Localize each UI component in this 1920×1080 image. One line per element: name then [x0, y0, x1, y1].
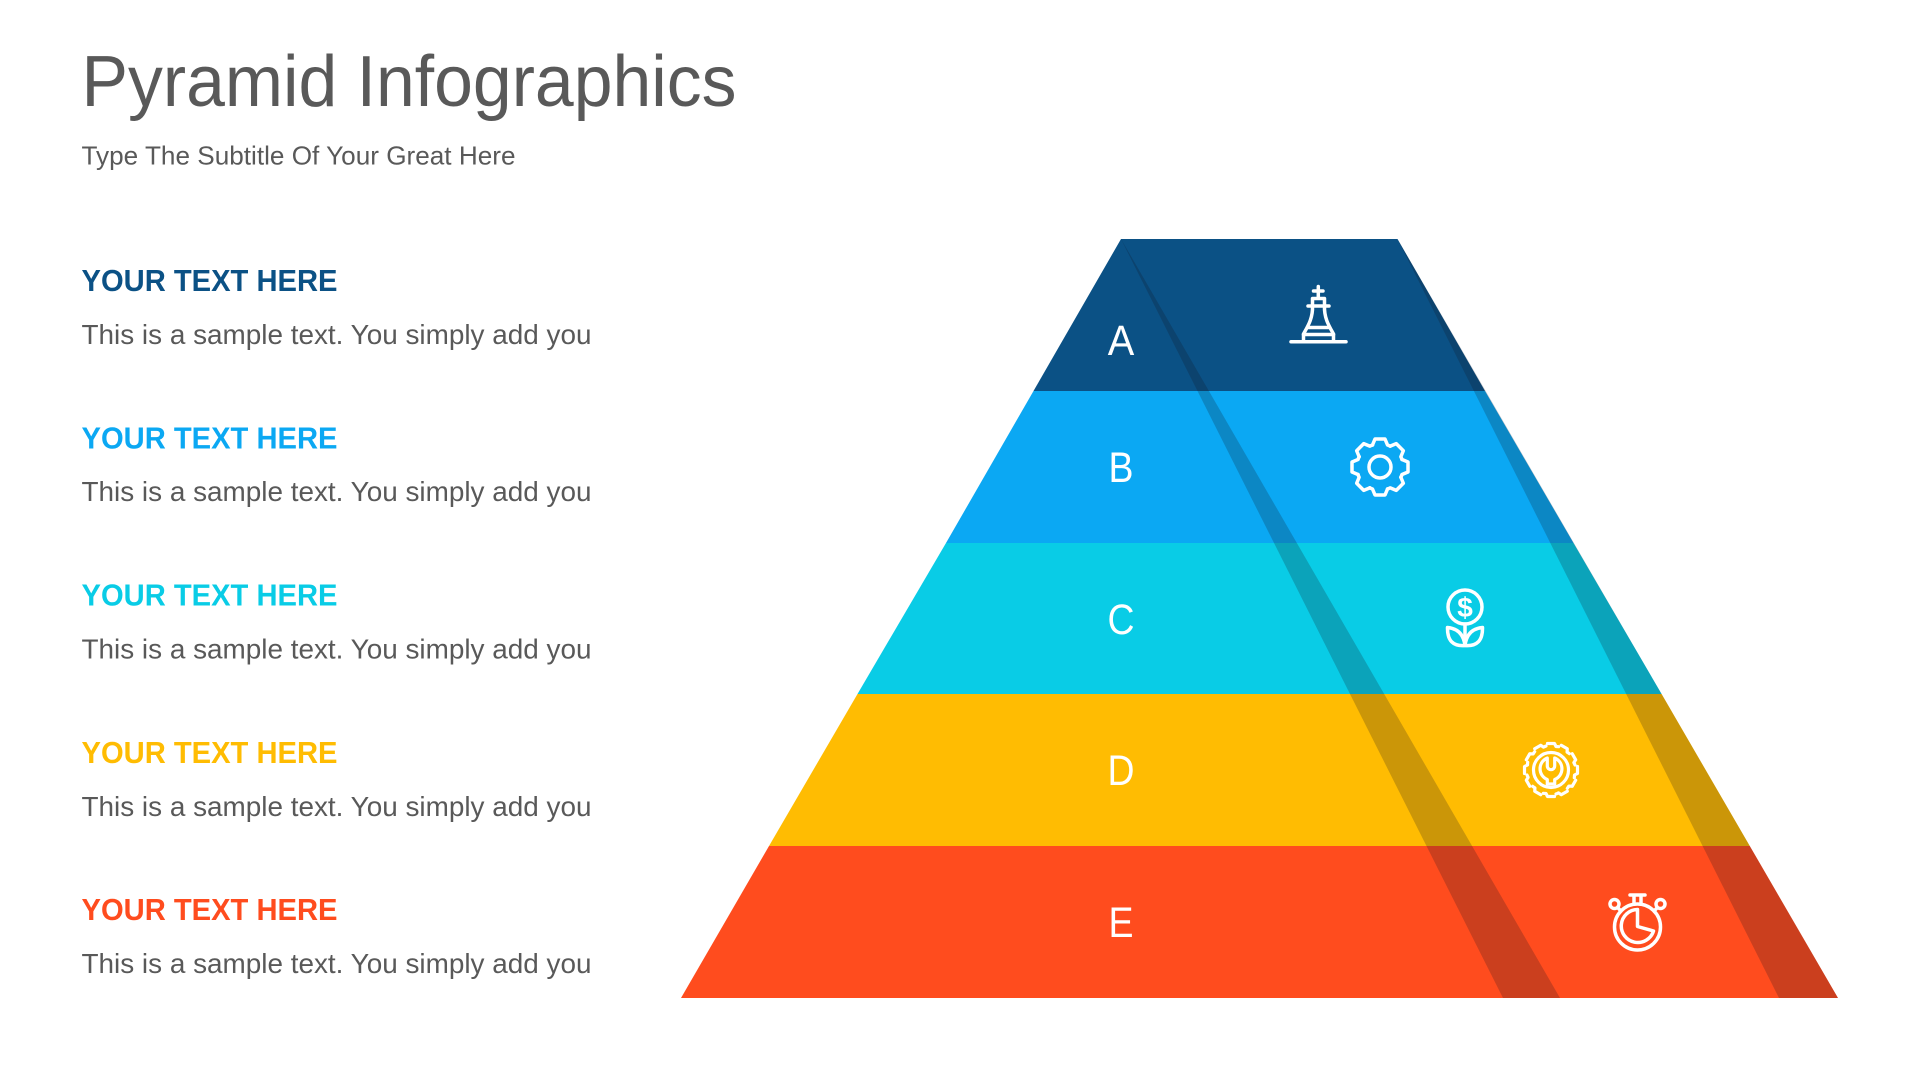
band C — [858, 543, 1662, 694]
body B: This is a sample text. You simply add you — [82, 476, 592, 507]
heading D: YOUR TEXT HERE — [82, 735, 338, 770]
letter A: A — [1108, 317, 1135, 365]
icon: money plant — [1447, 590, 1483, 646]
letter D: D — [1108, 747, 1134, 795]
icon: wrench gear — [1524, 743, 1578, 797]
title: Pyramid Infographics — [82, 42, 736, 122]
text block D — [82, 735, 592, 822]
heading B: YOUR TEXT HERE — [82, 420, 338, 456]
icon: stopwatch — [1610, 895, 1665, 950]
letter E: E — [1108, 899, 1134, 947]
inner shadow stripe — [1121, 239, 1560, 998]
letter B: B — [1108, 444, 1134, 492]
body E: This is a sample text. You simply add you — [82, 948, 592, 979]
body C: This is a sample text. You simply add you — [82, 634, 592, 664]
text block B — [82, 420, 592, 507]
heading A: YOUR TEXT HERE — [82, 263, 338, 298]
band B — [946, 391, 1574, 543]
pyramid — [681, 239, 1838, 998]
icon: money plant: $ — [1457, 592, 1473, 623]
icon: chess king — [1291, 286, 1346, 342]
band A — [1034, 239, 1485, 391]
outer shadow stripe — [1398, 239, 1838, 998]
body D: This is a sample text. You simply add you — [82, 791, 592, 822]
letter C: C — [1108, 596, 1134, 644]
body A: This is a sample text. You simply add you — [82, 319, 592, 350]
icon: gear — [1352, 439, 1408, 495]
heading E: YOUR TEXT HERE — [82, 892, 338, 927]
band D — [769, 694, 1750, 846]
text block A — [82, 263, 592, 350]
band E — [681, 846, 1838, 998]
heading C: YOUR TEXT HERE — [82, 578, 338, 612]
subtitle: Type The Subtitle Of Your Great Here — [82, 140, 516, 170]
text block C — [82, 578, 592, 664]
text block E — [82, 892, 592, 979]
